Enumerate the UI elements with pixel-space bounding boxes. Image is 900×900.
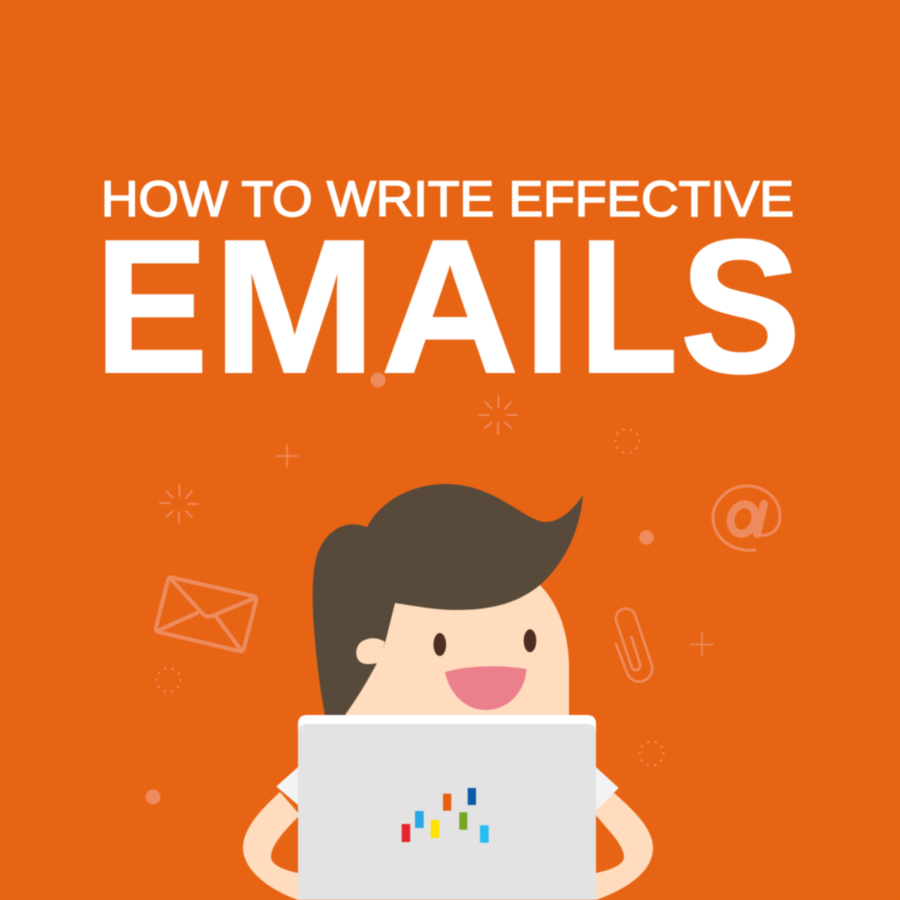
right arm xyxy=(594,792,653,900)
icon: paperclip xyxy=(616,609,652,682)
left arm xyxy=(243,792,300,900)
title line: how to write effective: HOW TO WRITE EFFECTIVE xyxy=(101,171,794,227)
icon: top burst xyxy=(479,396,517,434)
left sleeve xyxy=(277,766,300,806)
icon: left burst xyxy=(160,485,198,523)
character xyxy=(243,484,653,900)
laptop lid xyxy=(298,724,596,900)
icon: envelope xyxy=(156,577,256,651)
icon: dot under title xyxy=(370,372,386,388)
laptop xyxy=(298,715,596,900)
title line: emails: S xyxy=(680,201,801,413)
icon: left dotted circle xyxy=(156,668,180,692)
icon: top dotted circle xyxy=(615,429,639,453)
right eye xyxy=(524,629,536,652)
icon: lower left dot xyxy=(146,790,160,804)
icon: right dot xyxy=(639,530,654,545)
laptop lid edge xyxy=(298,715,596,900)
icon: at sign xyxy=(713,486,780,550)
right sleeve xyxy=(594,766,618,812)
title line: emails: M xyxy=(213,201,376,413)
icon: right plus xyxy=(691,633,713,655)
left eye xyxy=(434,633,446,656)
background icons xyxy=(146,372,780,804)
ear xyxy=(356,638,385,664)
hair xyxy=(313,484,583,715)
title line: emails: A xyxy=(381,201,519,413)
title line: emails: I xyxy=(524,201,570,413)
title line: emails: L xyxy=(579,201,678,413)
mouth xyxy=(445,666,526,710)
laptop logo xyxy=(402,788,489,843)
title line: emails: E xyxy=(95,201,208,413)
title xyxy=(95,171,801,413)
icon: lower right dotted circle xyxy=(640,742,664,766)
head xyxy=(340,585,569,720)
icon: left plus xyxy=(276,445,298,467)
